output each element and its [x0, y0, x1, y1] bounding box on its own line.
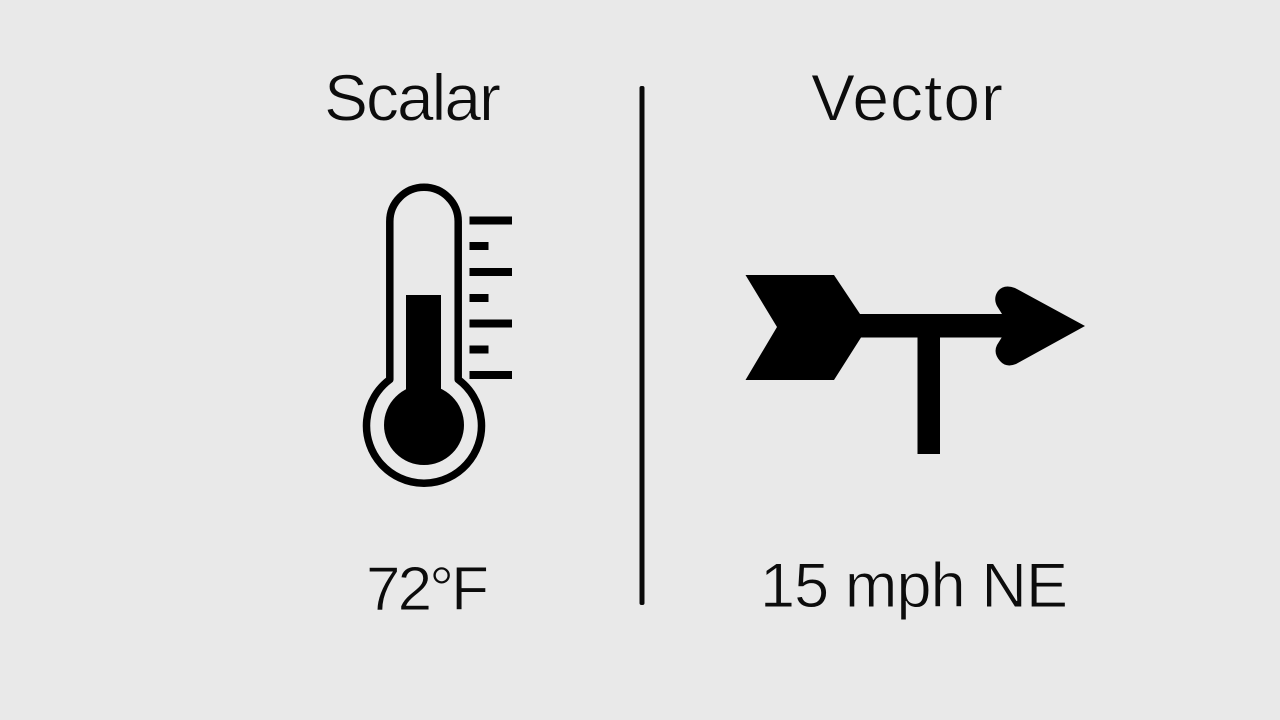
- label: 72°F: 72°F: [366, 555, 489, 624]
- center divider line: [640, 86, 644, 605]
- icon: wind vane: [746, 275, 1085, 454]
- heading: Scalar: Scalar: [324, 60, 501, 134]
- heading: Vector: Vector: [811, 60, 1003, 134]
- icon: thermometer: [366, 187, 512, 483]
- label: 15 mph NE: 15 mph NE: [760, 551, 1068, 621]
